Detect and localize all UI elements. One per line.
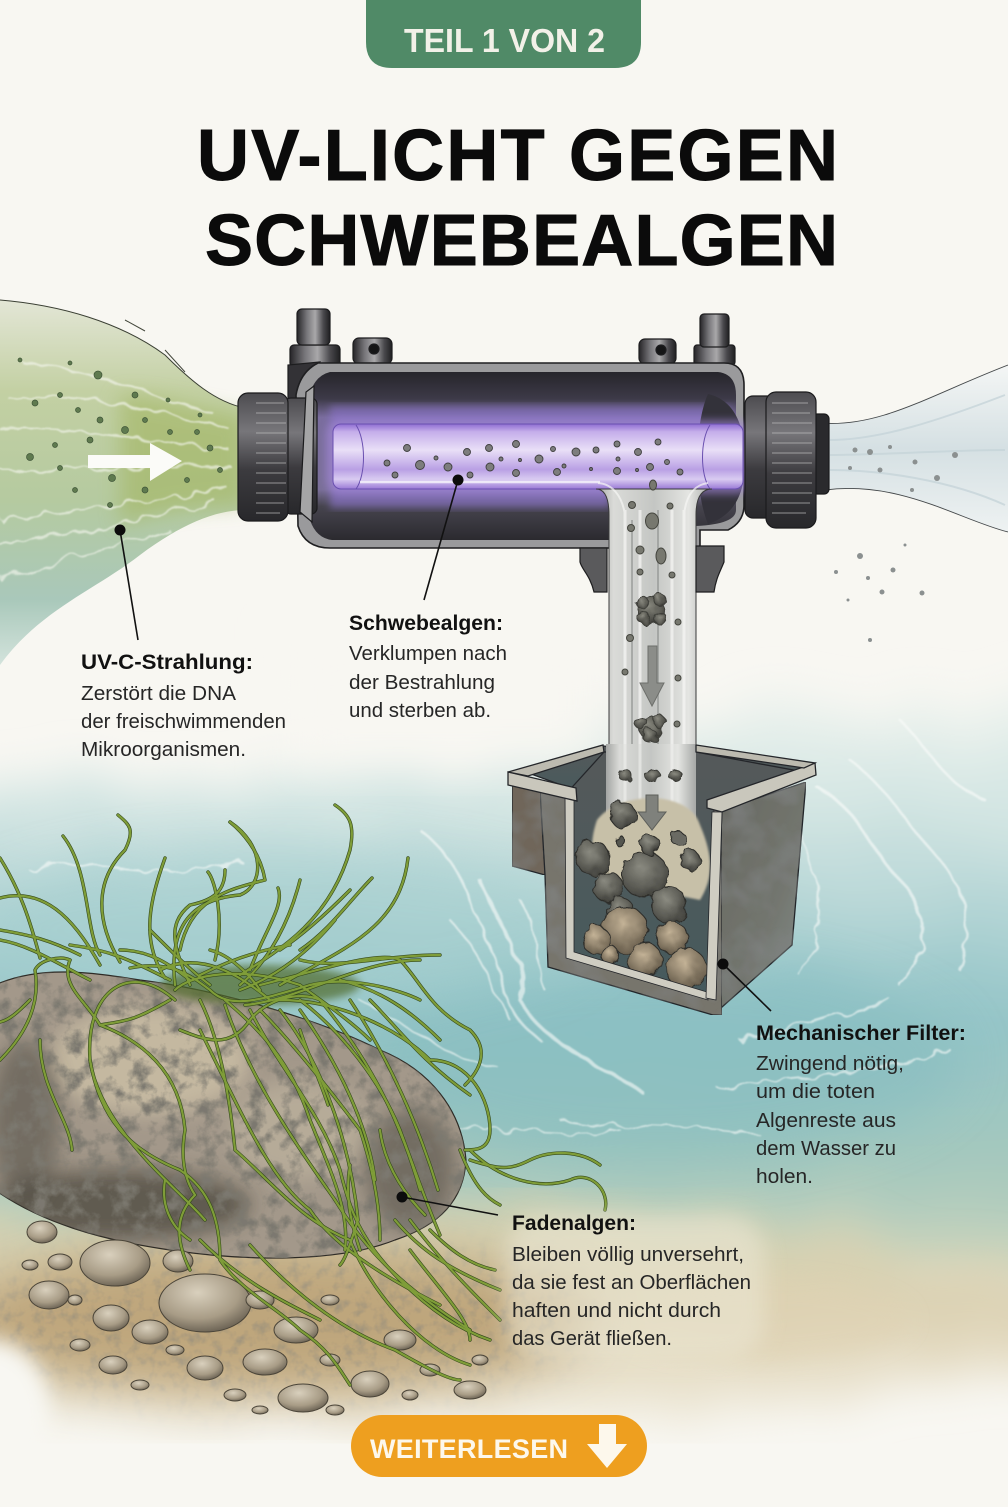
callout: UV-C-Strahlung: der freischwimmenden bbox=[81, 711, 286, 733]
callout: UV-C-Strahlung: Zerstört die DNA bbox=[81, 683, 237, 705]
right union nut bbox=[745, 392, 829, 528]
title: UV-LICHT GEGEN bbox=[197, 116, 838, 196]
callout: UV-C-Strahlung: Mikroorganismen. bbox=[81, 739, 246, 761]
callout: UV-C-Strahlung: UV-C-Strahlung: bbox=[81, 651, 253, 674]
white flow arrow bbox=[88, 443, 182, 481]
rock bbox=[0, 972, 466, 1258]
particles falling in pipe bbox=[622, 480, 681, 727]
button: weiterlesen: WEITERLESEN bbox=[370, 1434, 568, 1464]
callout: Schwebealgen: Schwebealgen: bbox=[349, 612, 503, 635]
label halo behind Fadenalgen bbox=[505, 1215, 765, 1360]
UV housing bbox=[296, 363, 745, 548]
callout: Schwebealgen: Verklumpen nach bbox=[349, 643, 507, 665]
clumps in the pipe bbox=[619, 594, 681, 782]
callout: Fadenalgen: Bleiben völlig unversehrt, bbox=[512, 1244, 744, 1266]
callout: Mechanischer Filter: um die toten bbox=[756, 1081, 875, 1103]
button: weiterlesen bbox=[351, 1415, 647, 1477]
callout: Fadenalgen: das Gerät fließen. bbox=[512, 1328, 672, 1350]
callout: Mechanischer Filter: dem Wasser zu bbox=[756, 1138, 896, 1160]
teil badge: TEIL 1 VON 2 bbox=[404, 22, 605, 59]
filter box front frame bbox=[508, 745, 816, 1015]
teil badge bbox=[366, 0, 641, 68]
callout: Fadenalgen bbox=[396, 1192, 751, 1350]
vertical outlet pipe bbox=[596, 483, 712, 778]
water body background bbox=[0, 640, 1008, 1290]
callout: Mechanischer Filter: Mechanischer Filter: bbox=[756, 1022, 966, 1045]
callout: UV-C-Strahlung bbox=[81, 524, 286, 761]
callout: Fadenalgen: haften und nicht durch bbox=[512, 1300, 721, 1322]
callout: Mechanischer Filter: Zwingend nötig, bbox=[756, 1053, 904, 1075]
sand floor background bbox=[0, 1188, 1008, 1440]
callout: Fadenalgen: Fadenalgen: bbox=[512, 1212, 636, 1235]
filter box back and side bbox=[512, 744, 815, 1015]
left union nut bbox=[238, 386, 317, 522]
filter contents: dead algae clumps bbox=[576, 795, 710, 988]
algae dense hub bbox=[160, 965, 360, 1005]
right outflow clear water bbox=[820, 365, 1008, 642]
bottom flanges bbox=[580, 546, 724, 592]
title bbox=[197, 116, 838, 281]
pebbles on the bottom bbox=[22, 1221, 488, 1415]
filamentous algae strands bbox=[0, 805, 606, 1385]
callout: Schwebealgen: der Bestrahlung bbox=[349, 672, 495, 694]
grey down arrow in pipe bbox=[640, 646, 664, 706]
title: SCHWEBEALGEN bbox=[205, 201, 838, 281]
algae particles in tube bbox=[384, 439, 683, 478]
top fittings bbox=[288, 309, 735, 415]
callout: Fadenalgen: da sie fest an Oberflächen bbox=[512, 1272, 751, 1294]
callout: Schwebealgen: und sterben ab. bbox=[349, 700, 491, 722]
glowing UV tube bbox=[326, 420, 751, 494]
left inflow water with green algae bbox=[0, 300, 245, 665]
callout: Mechanischer Filter: holen. bbox=[756, 1166, 813, 1188]
callout: Schwebealgen bbox=[349, 474, 507, 722]
callout: Mechanischer Filter: Algenreste aus bbox=[756, 1110, 896, 1132]
callout: Mechanischer Filter bbox=[718, 958, 966, 1188]
